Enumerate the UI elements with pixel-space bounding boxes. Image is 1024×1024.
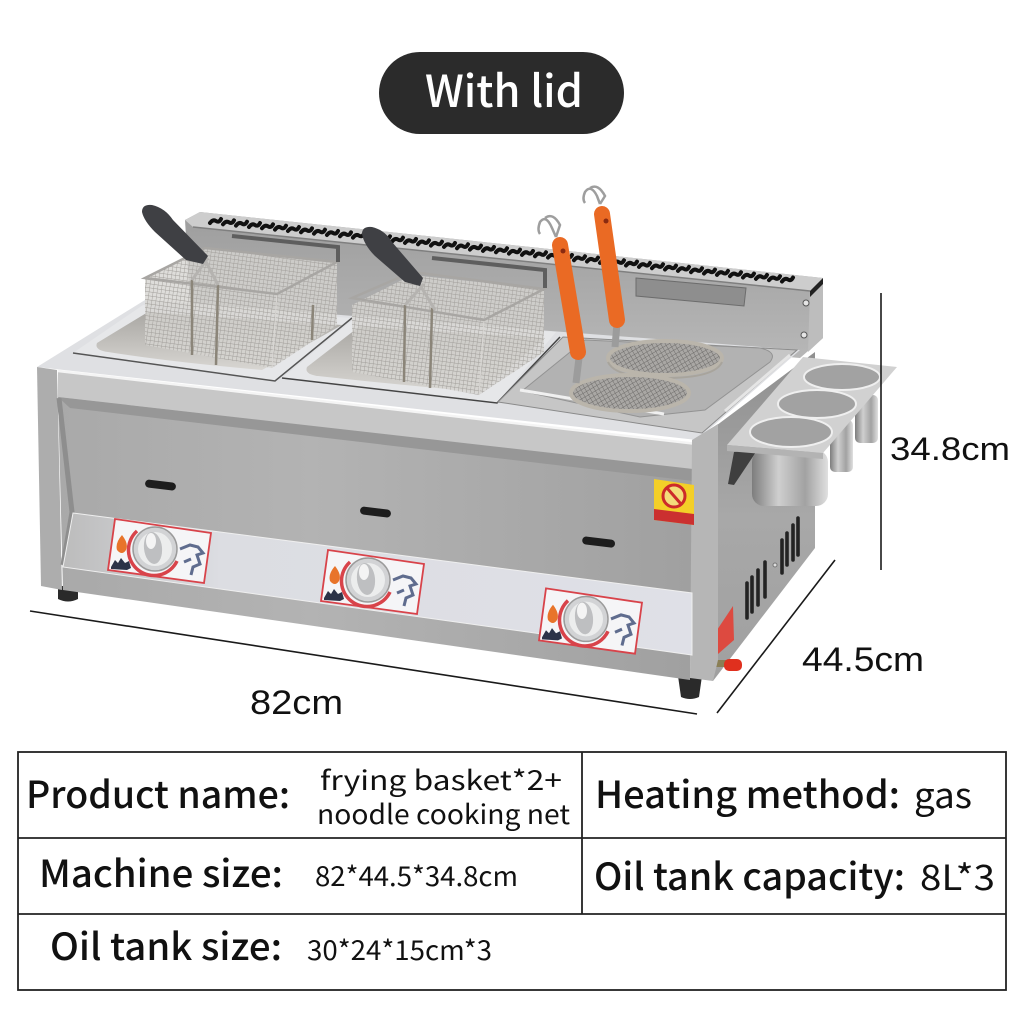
row 2: machine size: 82*44.5*34.8cm [315,855,518,894]
left post [37,367,62,590]
backsplash [185,212,823,358]
gas inlet [716,659,742,671]
control plate [63,513,692,655]
row 2: oil tank capacity: Oil tank capacity: [594,847,905,901]
row 1: product name: noodle cooking net [317,793,570,832]
row 3: oil tank size: Oil tank size: [50,917,282,971]
row 2: oil tank capacity: 8L*3 [920,850,995,901]
right post [690,424,718,681]
vent slots on side [747,518,798,618]
specification table [18,752,1006,990]
sticker 1 and knob [108,519,211,583]
row 2: machine size [39,844,518,898]
fryer product illustration [37,187,897,699]
orange net handles [538,187,617,383]
dimension label: 82cm: 82cm [250,684,343,722]
left frying basket [145,236,338,368]
front rim [58,371,697,470]
dimension label: 44.5cm: 44.5cm [802,641,924,679]
burner slots [145,479,615,548]
top surface [37,300,800,440]
title pill: With lid [379,52,624,134]
red side label [717,606,734,654]
row 2: machine size: Machine size: [39,844,283,898]
table grid [18,752,1006,990]
middle tank [282,318,560,403]
middle frying basket [352,258,545,395]
sticker 3 and knob [539,588,642,654]
front panel [58,397,693,680]
warning sticker [654,479,694,525]
row 1: heating method: Heating method: [595,765,900,819]
left tank [73,305,352,381]
right side face [697,352,815,681]
row 1: heating method: gas [914,768,972,819]
row 1: product name: Product name: [26,765,290,819]
noodle tank [498,337,797,433]
noodle nets [571,341,722,411]
utensil holder tray with cups [727,357,897,506]
dimension lines [30,293,881,714]
black basket handles [142,205,423,286]
row 1: product name: frying basket*2+ [320,759,562,798]
row 1: product name [26,759,570,832]
feet [58,586,702,699]
row 3: oil tank size [50,917,492,971]
row 3: oil tank size: 30*24*15cm*3 [307,929,492,968]
title pill: With lid: With lid [425,56,583,120]
dimension label: 34.8cm: 34.8cm [890,431,1010,467]
sticker 2 and knob [321,550,424,614]
